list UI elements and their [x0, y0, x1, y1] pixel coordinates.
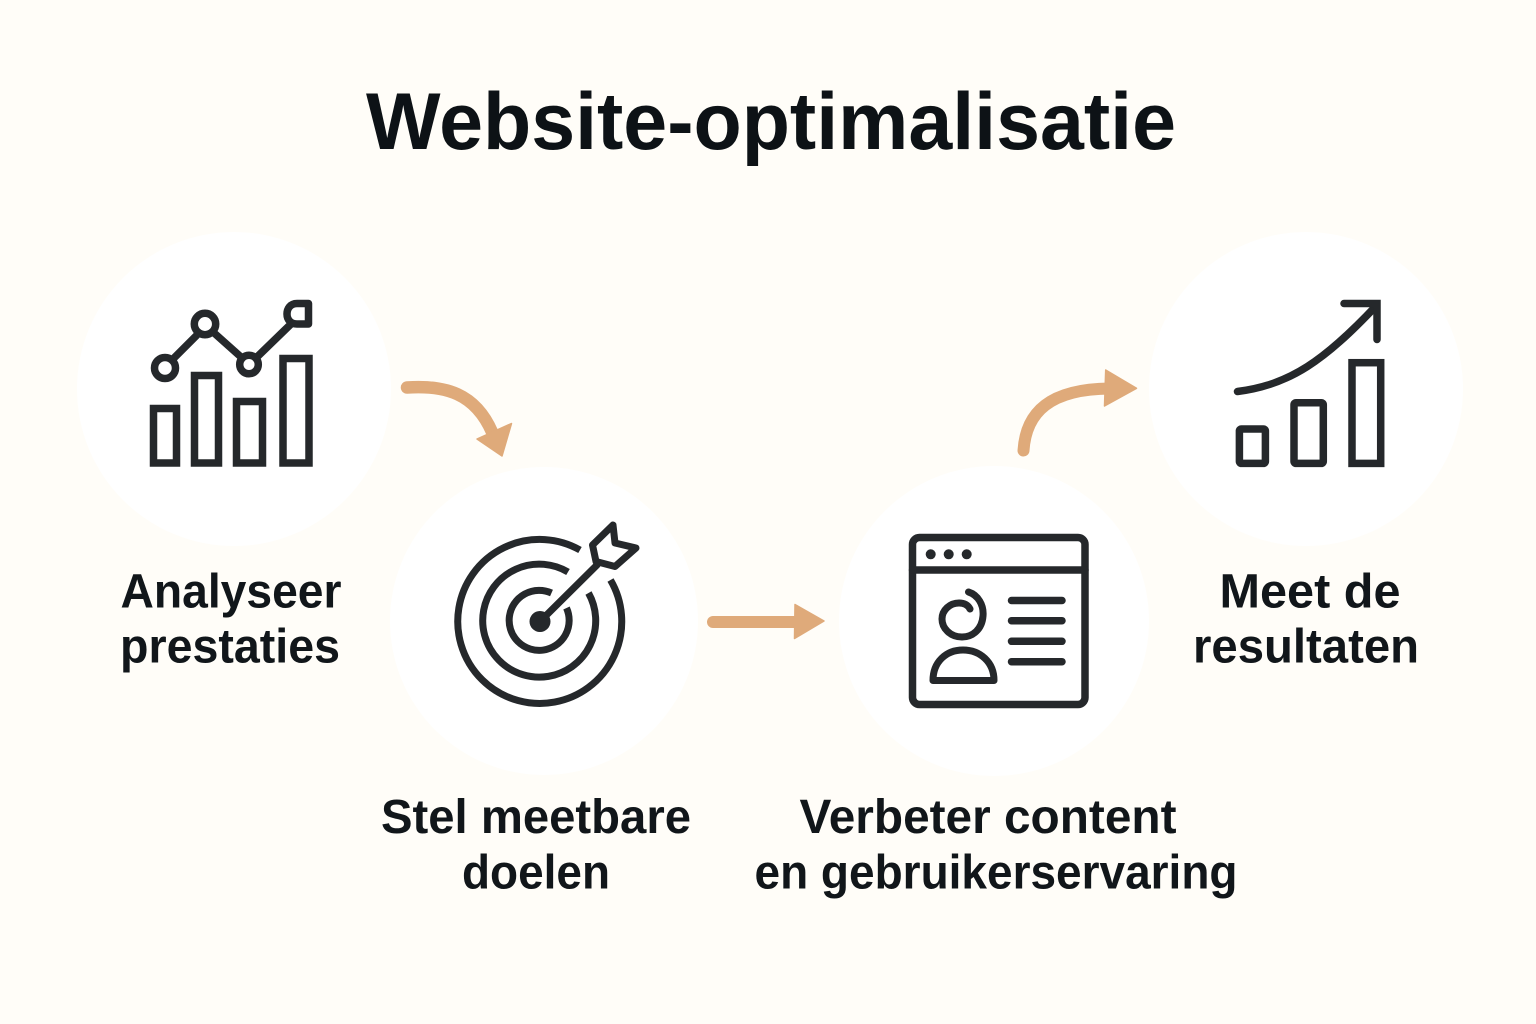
label: stel meetbare doelen: [381, 791, 691, 900]
step 1: analyseer prestaties: [77, 232, 391, 674]
step 2: stel meetbare doelen: [381, 467, 698, 900]
label: verbeter content en gebruikerservaring: [754, 791, 1238, 900]
icon: rising bars with arrow: [1238, 304, 1381, 463]
title: Website-optimalisatie: [366, 77, 1176, 167]
icon: bar chart with trend line: [154, 304, 309, 463]
icon: browser window with user profile: [912, 538, 1085, 704]
circle background 4: [1149, 232, 1463, 546]
label: analyseer prestaties: Analyseer: [120, 566, 342, 618]
label: meet de resultaten: [1193, 566, 1419, 674]
label: verbeter content en gebruikerservaring: Verbeter content: [800, 791, 1177, 844]
step 3: verbeter content: [754, 466, 1238, 900]
arrow: step 2 to step 3: [713, 604, 824, 638]
arrow: step 1 to step 2: [407, 387, 512, 456]
label: meet de resultaten: Meet de: [1220, 566, 1400, 618]
icon: target with arrow: [458, 525, 636, 703]
circle background 2: [390, 467, 698, 775]
label: stel meetbare doelen: doelen: [462, 846, 610, 900]
circle background 3: [839, 466, 1149, 776]
label: analyseer prestaties: [120, 566, 342, 674]
label: analyseer prestaties: prestaties: [120, 620, 340, 674]
circle background 1: [77, 232, 391, 546]
label: meet de resultaten: resultaten: [1193, 620, 1419, 674]
step 4: meet de resultaten: [1149, 232, 1463, 674]
label: verbeter content en gebruikerservaring: en gebruikerservaring: [754, 846, 1238, 900]
arrow: step 3 to step 4: [1024, 370, 1136, 450]
label: stel meetbare doelen: Stel meetbare: [381, 791, 691, 844]
